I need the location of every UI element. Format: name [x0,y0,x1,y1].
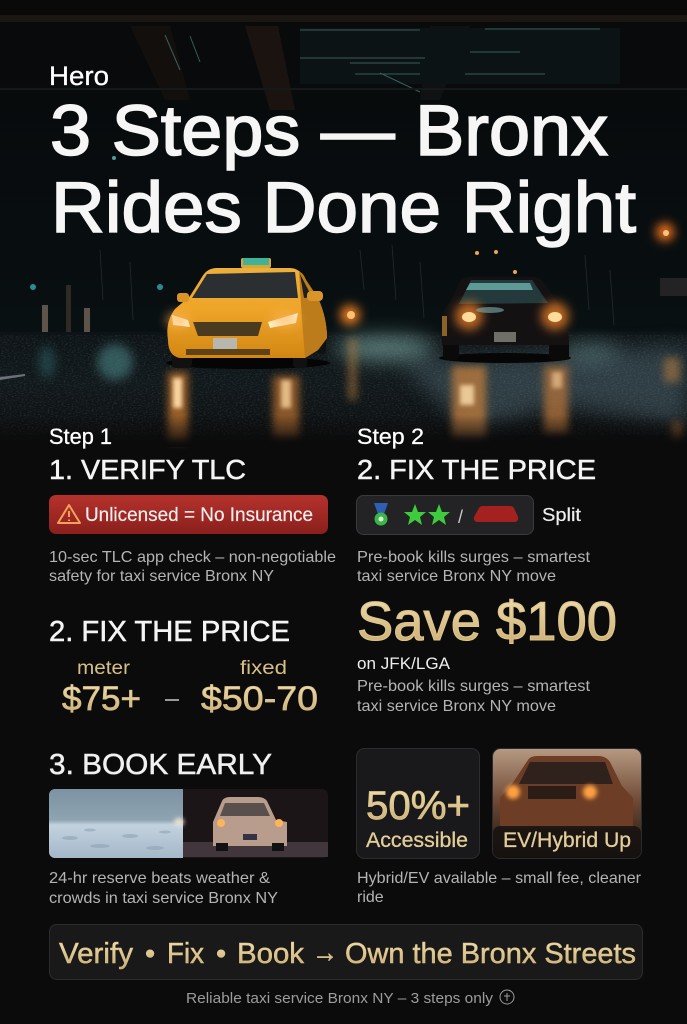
panel: step 1 verify [49,424,336,585]
rating chip: / [458,507,463,527]
heading: fix the price: 2. FIX THE PRICE [357,454,596,485]
body text: pre-book repeat: taxi service Bronx NY move [357,698,556,715]
body text: TLC check: 10-sec TLC app check – non-negotiable [49,549,336,566]
icon: warning triangle [58,505,80,523]
body text: pre-book repeat: Pre-book kills surges – smartest [357,678,591,695]
body text: pre-book repeat [357,678,591,715]
call-to-action banner: • [216,938,226,970]
card: 50% accessible: Accessible [366,829,468,852]
footer note: Reliable taxi service Bronx NY – 3 steps only [186,991,494,1007]
yellow taxi [166,258,330,369]
panel: step 2 [356,424,617,715]
body text: hybrid [357,870,642,906]
call-to-action banner: Fix [167,938,204,970]
warning pill: Unlicensed = No Insurance [85,505,313,526]
hero photo: rainy Bronx street [0,0,687,445]
savings caption: on JFK/LGA [357,654,451,673]
heading: verify TLC: 1. VERIFY TLC [49,454,246,485]
call-to-action banner: Book [237,938,304,970]
body text: TLC check [49,549,336,585]
call-to-action banner: Own the Bronx Streets [345,938,636,970]
price labels: meter [77,658,131,679]
card: 50% accessible [356,748,480,858]
step 1 label: Step 1 [49,424,112,449]
rating chip [356,496,581,534]
body text: hybrid: Hybrid/EV available – small fee, cleaner [357,870,642,887]
call-to-action banner: • [145,938,155,970]
body text: reserve [49,870,278,907]
call-to-action banner: Verify [59,938,134,970]
title [50,92,636,248]
SUV photo [493,756,641,858]
icon: medal [374,503,388,526]
body text: hybrid: ride [357,889,384,906]
panel: book early [49,749,328,907]
icon: two green stars [404,504,450,525]
price values [62,680,318,718]
dash between prices [165,699,179,701]
icon: circled plus [500,990,514,1004]
savings figure: Save $100 [357,590,617,652]
price labels [77,658,287,679]
body text: pre-book: Pre-book kills surges – smartest [357,549,591,566]
fade into dark lower section [0,415,687,447]
price values: $75+ [62,680,141,718]
call-to-action banner [50,924,642,980]
icon: red taxi roof sign [474,506,518,522]
warning pill [49,495,328,534]
price values: $50-70 [201,680,318,718]
rating chip: Split [542,505,581,525]
heading: book early: 3. BOOK EARLY [49,749,272,781]
hero label: Hero [49,61,109,91]
card: EV hybrid: EV/Hybrid Up [503,829,631,852]
body text: reserve: crowds in taxi service Bronx NY [49,890,278,907]
body text: pre-book: taxi service Bronx NY move [357,568,556,585]
headlight reflections [168,338,682,442]
panel: fix the price comparison [49,616,318,718]
body text: pre-book [357,549,591,585]
card: 50% accessible: 50%+ [366,784,470,828]
body text: TLC check: safety for taxi service Bronx NY [49,568,274,585]
step 2 label: Step 2 [357,424,424,449]
elevated rail structure [0,15,687,110]
title: Rides Done Right [51,169,636,248]
heading: fix the price: 2. FIX THE PRICE [49,616,290,648]
title: 3 Steps — Bronx [50,92,608,171]
price labels: fixed [240,658,287,679]
wet road [0,332,687,445]
rain streaks [100,245,614,325]
body text: reserve: 24-hr reserve beats weather & [49,870,270,887]
card: EV hybrid [492,748,642,858]
distant lights [30,156,687,337]
split photo: snow and SUV [49,789,328,858]
call-to-action banner: → [312,937,338,969]
dark car [439,277,571,363]
